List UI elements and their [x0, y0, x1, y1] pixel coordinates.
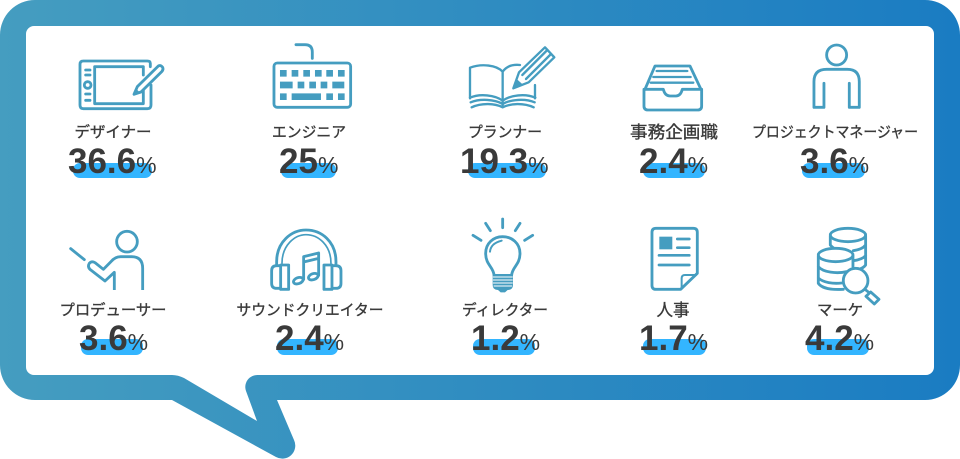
value: 2.4%	[275, 319, 344, 358]
label: プロデューサー	[60, 301, 166, 319]
highlight bar	[473, 339, 535, 355]
highlight bar	[73, 163, 152, 178]
label: デザイナー	[74, 123, 152, 141]
highlight bar	[468, 163, 546, 178]
value: 3.6%	[79, 319, 148, 358]
value: 1.2%	[471, 319, 540, 358]
highlight bar	[277, 339, 338, 355]
label: エンジニア	[272, 124, 346, 141]
icon: headphones with notes	[272, 230, 341, 289]
value: 3.6%	[800, 142, 869, 181]
highlight bar	[643, 163, 705, 178]
label: サウンドクリエイター	[236, 302, 384, 319]
icon: keyboard	[274, 45, 351, 107]
icon: database with magnifier	[818, 228, 879, 304]
icon: pen tablet	[80, 61, 163, 109]
item: sound creator	[236, 230, 384, 358]
item: engineer	[272, 45, 351, 181]
icon: person	[814, 45, 859, 107]
label: マーケ	[817, 302, 863, 319]
label: 人事	[656, 301, 690, 320]
highlight bar	[807, 339, 869, 355]
icon: light bulb	[473, 219, 533, 292]
value: 2.4%	[639, 142, 708, 181]
item: designer	[68, 61, 163, 181]
label: プランナー	[468, 124, 542, 141]
item: director	[462, 219, 548, 358]
highlight bar	[802, 163, 865, 178]
item: project manager	[752, 45, 918, 181]
item: producer	[60, 231, 166, 358]
label: ディレクター	[462, 301, 548, 319]
value: 4.2%	[805, 319, 874, 358]
highlight bar	[81, 339, 143, 355]
icon: book and pencil	[470, 47, 554, 107]
highlight bar	[643, 339, 706, 355]
icon: document tray	[644, 66, 702, 110]
label: 事務企画職	[630, 123, 718, 142]
item: planner	[460, 47, 554, 181]
item: office planning	[630, 66, 718, 181]
icon: presenter with pointer	[71, 231, 143, 290]
value: 1.7%	[639, 319, 708, 358]
value: 25%	[279, 142, 338, 181]
value: 19.3%	[460, 142, 549, 181]
value: 36.6%	[68, 142, 157, 181]
item: marketing	[805, 228, 879, 358]
highlight bar	[281, 163, 336, 178]
icon: document	[652, 228, 697, 289]
label: プロジェクトマネージャー	[752, 124, 918, 141]
item: human resources	[639, 228, 708, 358]
